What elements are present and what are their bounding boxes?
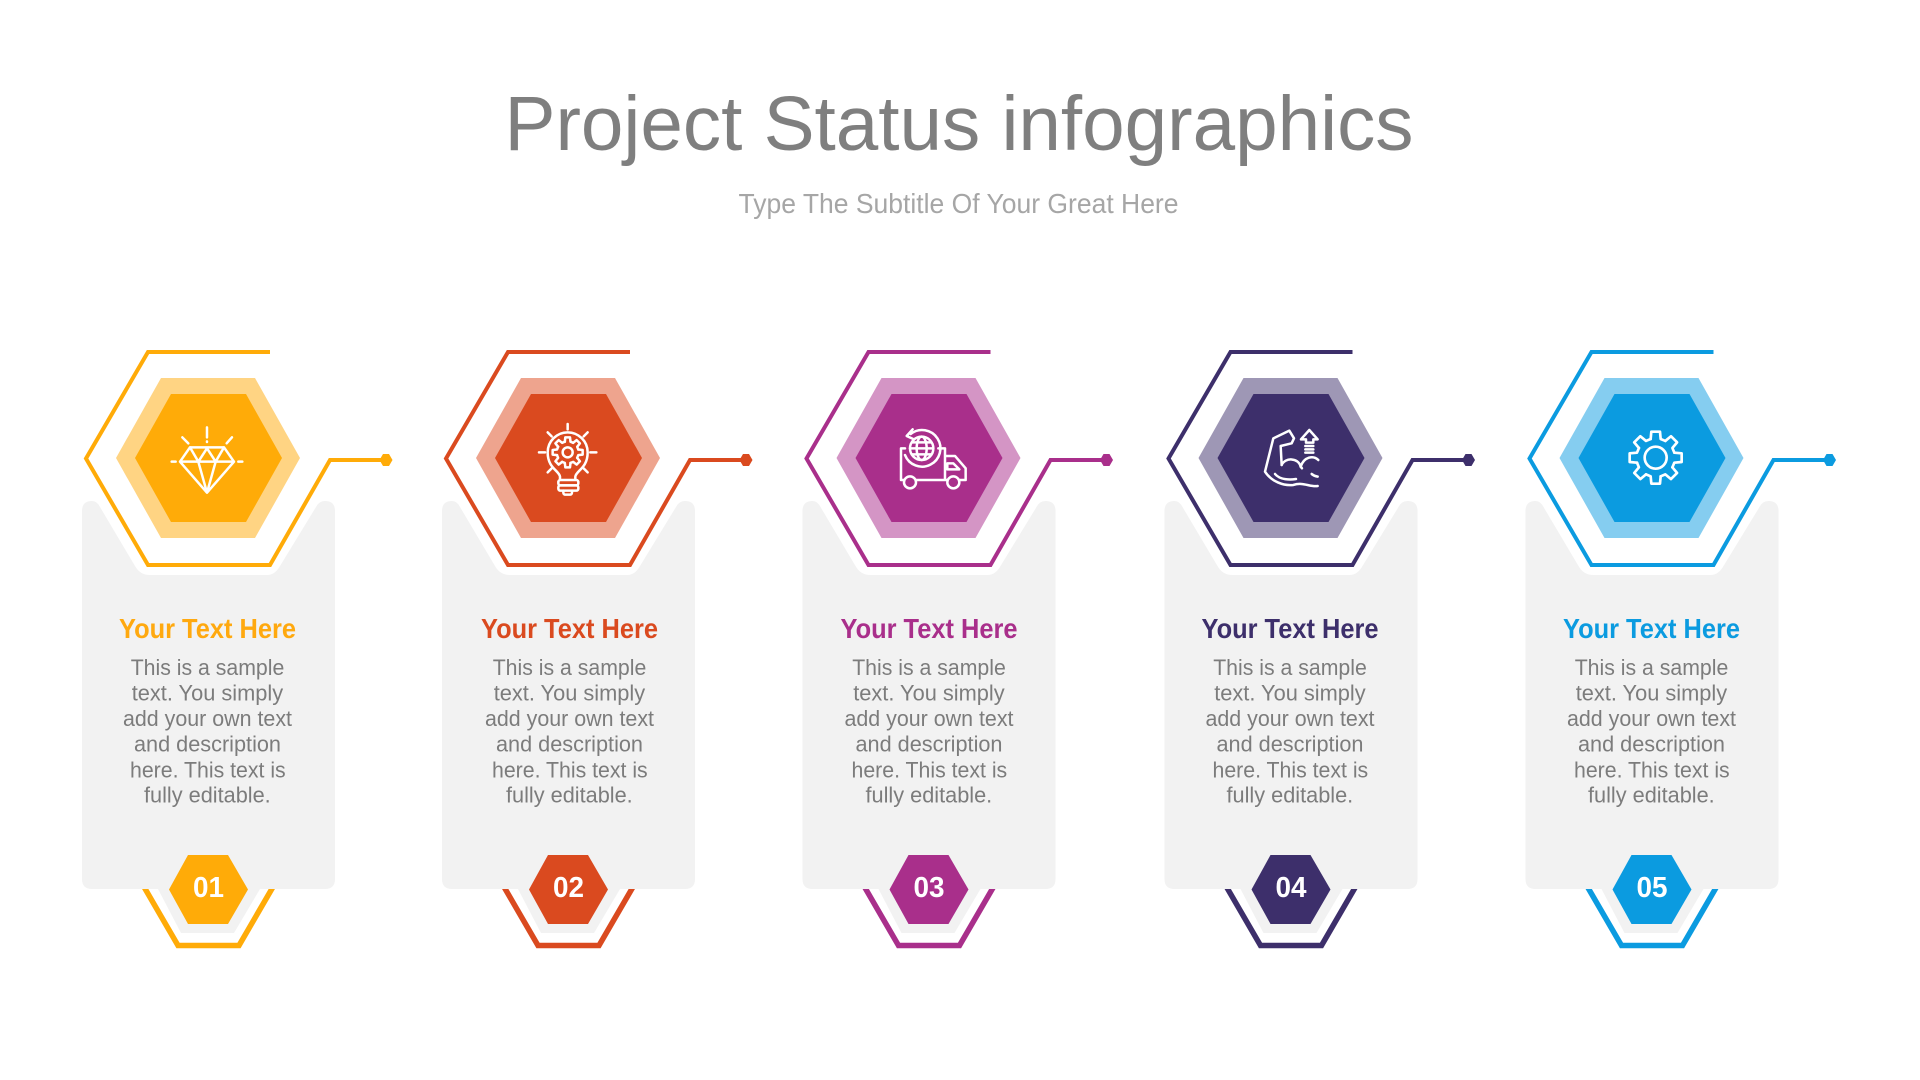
- body text: This is a sample: [1575, 655, 1728, 680]
- body text: add your own text: [485, 706, 654, 731]
- body text: add your own text: [1567, 706, 1736, 731]
- connector end dot: [380, 454, 392, 466]
- body text: This is a sample: [131, 655, 284, 680]
- grey hexagon lip: [1602, 889, 1704, 933]
- upper hexagon connector line: [1168, 352, 1468, 565]
- grey hexagon lip: [878, 889, 980, 933]
- grey hexagon lip: [158, 889, 260, 933]
- body text: fully editable.: [506, 783, 633, 808]
- body text: text. You simply: [494, 681, 645, 706]
- upper hexagon connector line: [1530, 352, 1830, 565]
- connector end dot: [1100, 454, 1113, 466]
- dark hexagon: [856, 394, 1002, 522]
- number badge: 01: [193, 872, 224, 904]
- body text: text. You simply: [1576, 681, 1727, 706]
- connector end dot: [1823, 454, 1836, 466]
- body text: text. You simply: [132, 681, 283, 706]
- title: Project Status infographics: [504, 81, 1414, 167]
- body text: fully editable.: [144, 783, 271, 808]
- body text: fully editable.: [1588, 783, 1715, 808]
- number badge: [890, 855, 968, 924]
- dark hexagon: [495, 394, 642, 522]
- body text: add your own text: [844, 706, 1014, 731]
- body text: [844, 655, 1014, 808]
- dark hexagon: [135, 394, 282, 522]
- subtitle: Type The Subtitle Of Your Great Here: [738, 188, 1178, 219]
- panel: step 04: [1164, 352, 1475, 946]
- heading: Your Text Here: [1202, 613, 1378, 644]
- card background: [442, 501, 695, 889]
- grey hexagon lip: [1240, 889, 1342, 933]
- connector end dot: [1462, 454, 1475, 466]
- icon: delivery truck with globe: [901, 429, 966, 488]
- number badge: 03: [914, 872, 944, 904]
- lower hexagon outline: [140, 880, 277, 946]
- card background: [802, 501, 1056, 889]
- icon: flexed arm with up arrow: [1265, 430, 1318, 486]
- body text: here. This text is: [492, 758, 648, 782]
- icon: gear: [1630, 432, 1682, 484]
- body text: add your own text: [123, 706, 292, 731]
- body text: and description: [496, 732, 643, 757]
- light hexagon: [476, 378, 660, 538]
- body text: [1567, 655, 1736, 808]
- body text: [1206, 655, 1374, 808]
- body text: and description: [134, 732, 281, 757]
- dark hexagon: [1578, 394, 1726, 522]
- grey hexagon lip: [518, 889, 620, 933]
- body text: and description: [856, 732, 1002, 757]
- number badge: 04: [1276, 872, 1306, 904]
- upper hexagon connector line: [446, 352, 746, 565]
- dark hexagon: [1218, 394, 1364, 522]
- card background: [1526, 501, 1778, 889]
- upper hexagon connector line: [86, 352, 386, 565]
- light hexagon: [116, 378, 300, 538]
- lower hexagon outline: [860, 880, 998, 946]
- lower hexagon outline: [1222, 880, 1360, 946]
- panel: step 03: [802, 352, 1113, 946]
- body text: here. This text is: [1574, 758, 1730, 782]
- panel: step 02: [442, 352, 752, 946]
- number badge: [529, 855, 608, 924]
- light hexagon: [1198, 378, 1382, 538]
- light hexagon: [836, 378, 1020, 538]
- number badge: [1612, 855, 1692, 924]
- body text: This is a sample: [1213, 655, 1367, 680]
- body text: text. You simply: [1214, 681, 1366, 706]
- body text: here. This text is: [130, 758, 286, 782]
- number badge: [169, 855, 248, 924]
- number badge: [1252, 855, 1330, 924]
- body text: and description: [1216, 732, 1364, 757]
- body text: fully editable.: [866, 783, 992, 808]
- body text: here. This text is: [852, 758, 1007, 782]
- body text: [123, 655, 292, 808]
- heading: Your Text Here: [481, 613, 658, 644]
- body text: here. This text is: [1212, 758, 1368, 782]
- icon: diamond: [172, 427, 242, 493]
- body text: This is a sample: [493, 655, 646, 680]
- number badge: 02: [553, 872, 584, 904]
- light hexagon: [1560, 378, 1744, 538]
- card background: [82, 501, 335, 889]
- heading: Your Text Here: [1563, 613, 1740, 644]
- body text: text. You simply: [853, 681, 1005, 706]
- lower hexagon outline: [1584, 880, 1720, 946]
- number badge: 05: [1636, 872, 1668, 904]
- connector end dot: [740, 454, 752, 466]
- body text: fully editable.: [1226, 783, 1353, 808]
- lower hexagon outline: [500, 880, 637, 946]
- body text: This is a sample: [852, 655, 1006, 680]
- panel: step 05: [1526, 352, 1836, 946]
- panel: step 01: [82, 352, 392, 946]
- heading: Your Text Here: [840, 613, 1018, 644]
- card background: [1164, 501, 1418, 889]
- body text: add your own text: [1206, 706, 1374, 731]
- body text: and description: [1578, 732, 1725, 757]
- heading: Your Text Here: [119, 613, 296, 644]
- body text: [485, 655, 654, 808]
- icon: light bulb with gear: [539, 424, 596, 495]
- upper hexagon connector line: [806, 352, 1106, 565]
